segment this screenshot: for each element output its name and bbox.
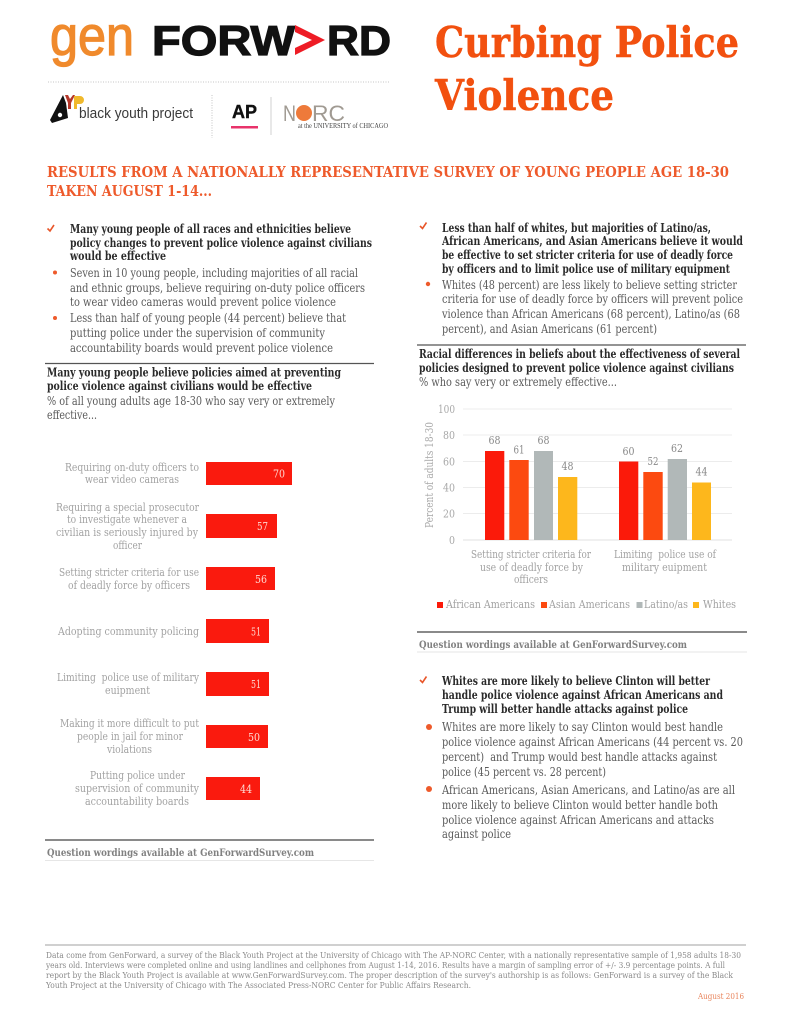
heading: left chart: % of all young adults age 18-30 who say very or extremely [47, 394, 335, 408]
footer: methodology note: Youth Project at the University of Chicago with The Associated Press-NORC Center for Public Affairs Research. [45, 980, 471, 990]
group: military equipment [614, 442, 717, 574]
bar: deadly force: 56 [255, 573, 267, 586]
icon: check mark [48, 225, 54, 231]
bar: deadly force: Setting stricter criteria for use [59, 566, 199, 579]
group: military equipment: Limiting police use of [614, 548, 717, 561]
y axis title: Percent of adults 18-30 [423, 422, 436, 528]
bar: accountability boards: accountability boards [85, 795, 189, 808]
footer: methodology note: report by the Black Youth Project is available at www.GenForwardSurvey.com. The proper description of the survey's authorship is as follows: GenForward is a survey of the Black [46, 970, 734, 980]
text block: racial differences findings: percent), and Asian Americans (61 percent) [442, 322, 657, 336]
heading: left chart: Many young people believe policies aimed at preventing [47, 366, 341, 380]
text block: policy changes findings [48, 222, 372, 355]
bar: military equipment: Limiting police use of military [57, 671, 200, 684]
group: stricter criteria: 68 [538, 434, 550, 447]
grouped bar chart: racial differences [423, 402, 736, 611]
date: August 2016 [697, 991, 744, 1001]
y axis labels [438, 402, 455, 547]
logo: AP [231, 102, 258, 128]
text block: racial differences findings [420, 221, 743, 336]
subtitle heading: RESULTS FROM A NATIONALLY REPRESENTATIVE SURVEY OF YOUNG PEOPLE AGE 18-30 [47, 164, 729, 181]
heading: right chart [419, 347, 740, 389]
logo: NORC at the University of Chicago: RC [312, 101, 345, 126]
title: Curbing Police [435, 18, 739, 67]
logo: GenForward: RD [327, 17, 391, 64]
bar: military equipment: 51 [251, 678, 261, 691]
bar: special prosecutor: 57 [257, 520, 268, 533]
group: military equipment: 52 [648, 455, 658, 468]
y axis labels: 100 [438, 402, 455, 416]
bar: accountability boards: Putting police under [90, 769, 186, 782]
text block: Clinton and Trump findings: police violence against African Americans and attacks [442, 813, 714, 827]
text block: Clinton and Trump findings: percent) and Trump would best handle attacks against [442, 750, 717, 764]
legend: African Americans [445, 598, 535, 611]
bar: minor violations [60, 717, 268, 756]
group: stricter criteria: use of deadly force by [480, 561, 584, 574]
y axis labels: 0 [449, 533, 455, 547]
text block: policy changes findings: putting police under the supervision of community [70, 326, 325, 340]
logo: black youth project: black youth project [79, 105, 194, 122]
group: stricter criteria: Setting stricter criteria for [471, 548, 592, 561]
y axis labels: 20 [443, 506, 455, 520]
bar: minor violations: violations [106, 743, 152, 756]
bar: special prosecutor [56, 501, 277, 552]
bar: special prosecutor: Requiring a special prosecutor [56, 501, 200, 514]
text block: racial differences findings: violence than African Americans (68 percent), Latino/as (68 [441, 307, 740, 321]
heading: left chart: effective... [47, 408, 97, 422]
y axis labels: 80 [443, 428, 455, 442]
logo: NORC at the University of Chicago [283, 101, 388, 130]
bar: accountability boards: supervision of community [75, 782, 200, 795]
legend [437, 598, 736, 611]
legend: Asian Americans [548, 598, 630, 611]
footer: methodology note [45, 950, 741, 990]
bar: community policing [57, 619, 269, 643]
text block: Clinton and Trump findings: Trump will better handle attacks against police [442, 702, 688, 716]
text block: Clinton and Trump findings [420, 674, 743, 841]
text block: Clinton and Trump findings: handle police violence against African Americans and [442, 688, 723, 702]
bar: military equipment [57, 671, 269, 697]
heading: left chart [47, 366, 341, 422]
subtitle heading [47, 164, 729, 200]
logo: GenForward: FORW [152, 17, 295, 64]
bar: minor violations: Making it more difficult to put [60, 717, 199, 730]
title [434, 18, 739, 120]
bar: video cameras: Requiring on-duty officers to [65, 461, 199, 474]
text block: Clinton and Trump findings: Whites are more likely to say Clinton would best handle [442, 720, 723, 734]
text block: policy changes findings: would be effective [69, 249, 166, 263]
bar: video cameras [65, 461, 292, 486]
bar: community policing: Adopting community policing [57, 625, 199, 638]
text block: Clinton and Trump findings: African Americans, Asian Americans, and Latino/as are all [441, 783, 735, 797]
text block: Clinton and Trump findings: police (45 percent vs. 28 percent) [442, 765, 606, 779]
text block: policy changes findings: policy changes to prevent police violence against civilians [70, 236, 372, 250]
source note: left chart: Question wordings available at GenForwardSurvey.com [47, 847, 314, 859]
group: stricter criteria: 48 [562, 460, 574, 473]
icon: check mark [420, 222, 426, 228]
text block: policy changes findings: Many young people of all races and ethnicities believe [70, 222, 351, 236]
group: stricter criteria [471, 434, 592, 586]
icon: check mark [420, 676, 426, 682]
bar: community policing: 51 [251, 626, 261, 638]
text block: racial differences findings: Less than half of whites, but majorities of Latino/as, [442, 221, 711, 235]
bar: military equipment: euipment [105, 684, 150, 697]
bar: special prosecutor: civilian is seriously injured by [56, 526, 199, 539]
legend: Whites [703, 598, 736, 611]
logo: NORC at the University of Chicago: at the UNIVERSITY of CHICAGO [298, 122, 388, 130]
heading: right chart: % who say very or extremely effective... [419, 375, 617, 389]
text block: policy changes findings: Seven in 10 young people, including majorities of all racial [70, 266, 358, 280]
group: stricter criteria: officers [514, 573, 548, 586]
bar: accountability boards: 44 [240, 783, 252, 796]
group: stricter criteria: 68 [488, 434, 500, 447]
text block: policy changes findings: to wear video cameras would prevent police violence [70, 295, 336, 309]
bar: video cameras: 70 [273, 468, 285, 480]
group: military equipment: 44 [696, 466, 708, 478]
group: military equipment: 62 [671, 442, 683, 455]
text block: Clinton and Trump findings: Whites are more likely to believe Clinton will better [441, 674, 711, 688]
bar: video cameras: wear video cameras [85, 473, 179, 486]
bar: minor violations: people in jail for minor [77, 730, 184, 743]
bar: special prosecutor: to investigate whenever a [67, 513, 187, 526]
y axis labels: 40 [443, 480, 455, 494]
bar: minor violations: 50 [248, 731, 260, 744]
group: stricter criteria: 61 [514, 444, 524, 456]
text block: policy changes findings: and ethnic groups, believe requiring on-duty police officers [70, 281, 365, 295]
text block: policy changes findings: accountability boards would prevent police violence [70, 341, 333, 355]
bar chart: effectiveness of policies [56, 461, 292, 808]
bar: special prosecutor: officer [113, 539, 143, 552]
subtitle heading: TAKEN AUGUST 1-14... [47, 183, 212, 200]
logo: GenForward: gen [50, 4, 134, 67]
legend: Latino/as [644, 598, 688, 611]
logo: AP: AP [232, 102, 257, 122]
text block: policy changes findings: Less than half of young people (44 percent) believe that [70, 311, 346, 325]
bar: accountability boards [75, 769, 260, 808]
group: military equipment: 60 [622, 445, 634, 458]
group: military equipment: military euipment [622, 561, 707, 574]
text block: Clinton and Trump findings: against police [442, 827, 511, 841]
heading: left chart: police violence against civilians would be effective [47, 379, 312, 393]
title: Violence [434, 71, 614, 120]
bar: deadly force: of deadly force by officers [68, 579, 190, 592]
logo: black youth project [50, 95, 194, 123]
bar: deadly force [59, 566, 275, 592]
source note: right chart: Question wordings available at GenForwardSurvey.com [419, 639, 687, 651]
text block: Clinton and Trump findings: more likely to believe Clinton would better handle both [442, 798, 718, 812]
logo: NORC at the University of Chicago: N [283, 101, 296, 126]
y axis labels: 60 [443, 454, 455, 468]
logo: GenForward [50, 4, 391, 67]
